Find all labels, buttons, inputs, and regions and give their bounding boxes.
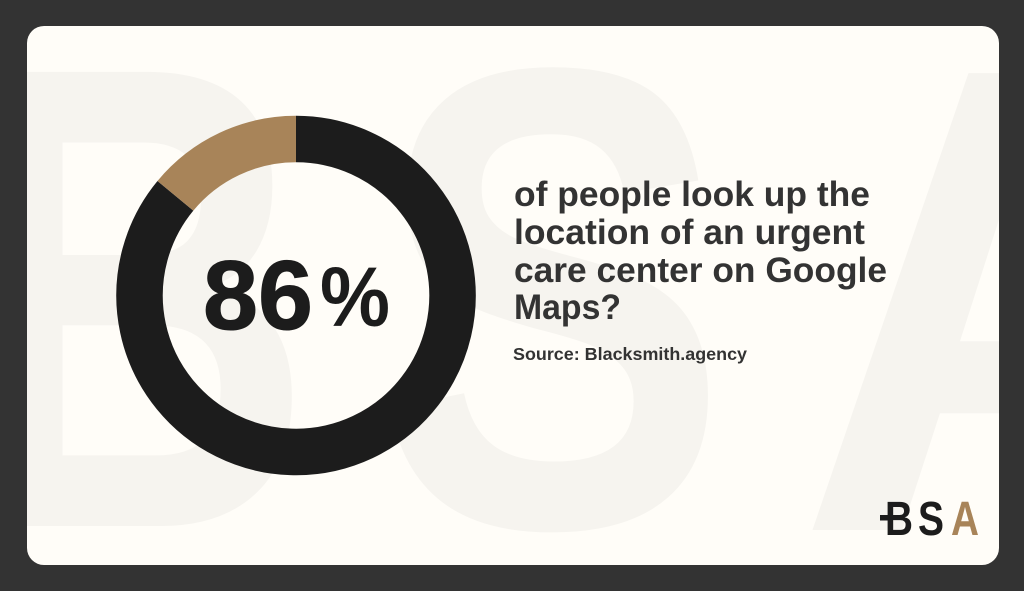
logo crossbar tick (880, 515, 890, 520)
source line: Source: Blacksmith.agency (513, 344, 747, 364)
heading: statistic description: location of an urgent (514, 213, 865, 252)
donut chart: 86 percent (140, 139, 453, 452)
donut segment: dark 86 percent (140, 139, 453, 452)
logo letter A: A (951, 493, 979, 546)
logo: BSA (880, 493, 979, 546)
heading: statistic description (514, 175, 887, 327)
donut segment: gold 14 percent (175, 139, 296, 196)
logo letter S: S (918, 493, 944, 546)
logo letter B: B (885, 493, 913, 546)
heading: statistic description: of people look up the (514, 175, 870, 214)
heading: statistic description: care center on Google (514, 251, 887, 290)
heading: statistic description: Maps? (514, 288, 621, 327)
donut value: 86: 86 (203, 240, 313, 350)
donut value: percent sign: % (320, 250, 390, 344)
